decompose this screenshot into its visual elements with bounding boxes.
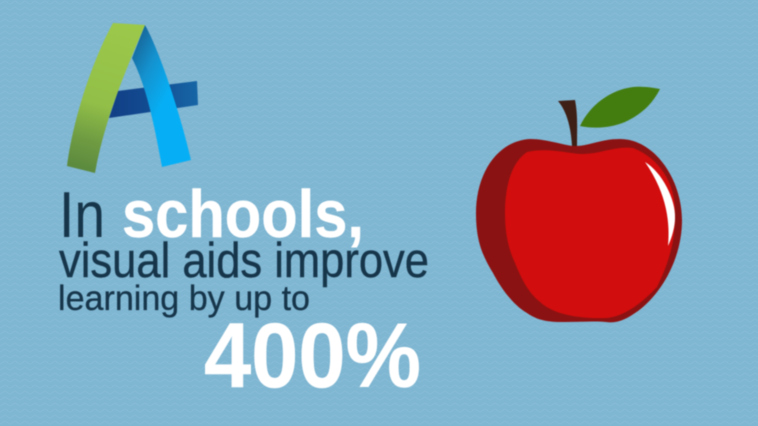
word: In: In xyxy=(59,178,105,251)
logo blue ribbon xyxy=(132,25,191,167)
logo crossbar xyxy=(109,81,198,118)
statistic: 400%: 400% xyxy=(204,305,421,407)
apple stem xyxy=(558,100,577,146)
apple dark body xyxy=(476,139,682,322)
apple highlight xyxy=(645,162,675,246)
heading: In schools, xyxy=(59,177,364,252)
text: learning by up to: learning by up to xyxy=(58,279,310,318)
icon: apple xyxy=(476,87,682,322)
logo green ribbon xyxy=(67,23,145,173)
apple bright face xyxy=(505,148,675,318)
icon: logo letter A xyxy=(67,23,198,173)
text: visual aids improve: visual aids improve xyxy=(59,234,429,288)
apple leaf xyxy=(580,87,660,128)
word: schools,: schools, xyxy=(122,177,364,252)
